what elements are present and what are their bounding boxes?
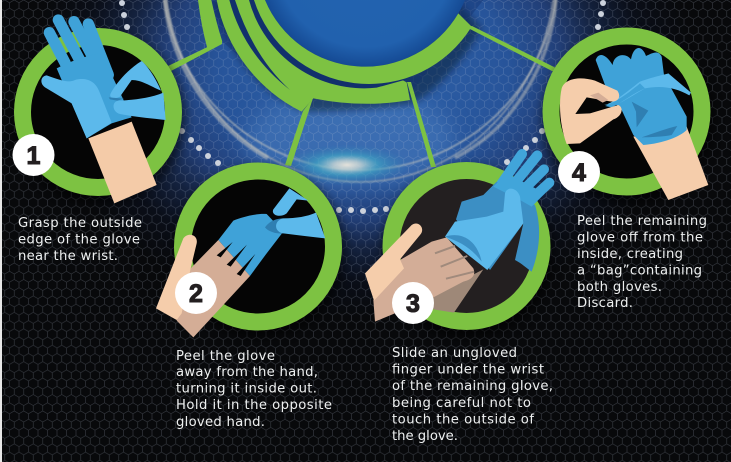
connector step 2 (285, 98, 313, 166)
central hub with green arcs (198, 0, 483, 112)
text: step 3: of the remaining glove, (392, 379, 553, 394)
arc to step 2 (217, 0, 410, 112)
bare hand (560, 78, 622, 144)
light ring with glow (162, 0, 558, 185)
dark crescents between arcs (229, 0, 290, 90)
text: step 2: turning it inside out. (176, 382, 317, 396)
text: step 1: near the wrist. (18, 249, 118, 264)
connectors (168, 26, 556, 167)
badge 2 (175, 272, 217, 314)
connector step 3 (407, 82, 436, 167)
step 1 illustration (12, 20, 186, 204)
text: step 4: Peel the remaining (577, 214, 707, 229)
glove on peeled hand (218, 214, 283, 276)
arm (88, 122, 157, 203)
peeled cuff (604, 73, 691, 105)
text: step 2: away from the hand, (176, 365, 318, 380)
text: step 4: Discard. (577, 296, 633, 311)
text: step 4: glove off from the (577, 230, 703, 246)
badge 1 (12, 134, 54, 176)
text: step 4: inside, creating (577, 247, 683, 262)
text: step 2 (176, 349, 332, 430)
text: step 2: gloved hand. (176, 415, 265, 430)
badge 3: 3 (406, 290, 420, 318)
text: step 1: Grasp the outside (18, 216, 142, 231)
text: step 3: the glove. (392, 429, 458, 444)
text: step 1: edge of the glove (18, 232, 140, 248)
text: step 3: Slide an ungloved (392, 346, 517, 361)
ring 1 (22, 36, 174, 188)
bare hand (373, 237, 474, 322)
glove front (445, 189, 523, 270)
step 4 illustration (542, 32, 714, 204)
gloved fingers base (493, 173, 545, 207)
arc to step 1 (198, 0, 222, 48)
step 2 illustration (156, 166, 346, 338)
disc (257, 0, 473, 67)
badge 4 (558, 151, 600, 193)
text: step 4: a “bag”containing (577, 264, 702, 278)
fingers (49, 20, 108, 75)
text: step 2: Peel the glove (176, 349, 275, 364)
connector step 4 (466, 26, 556, 72)
gloved pinching hand (273, 188, 308, 216)
badge 4: 4 (572, 159, 586, 187)
text: step 4: both gloves. (577, 280, 662, 295)
step 3 illustration (365, 154, 554, 338)
arm (633, 127, 708, 200)
text: step 3: being careful not to (392, 396, 531, 411)
bare hand (177, 240, 250, 337)
badge 1: 1 (27, 142, 41, 170)
glove rear (502, 154, 549, 203)
finger slits (217, 242, 255, 276)
text: step 2: Hold it in the opposite (176, 398, 332, 413)
badge 3 (392, 282, 434, 324)
text: step 3: touch the outside of (392, 412, 534, 428)
text: step 3 (392, 346, 553, 444)
connector step 1 (168, 40, 222, 71)
text: step 4 (577, 214, 707, 311)
dotted ring (119, 0, 606, 214)
glove (596, 48, 687, 145)
ring 4 (551, 36, 702, 187)
hand shadow (430, 269, 483, 313)
ring 3 (391, 170, 542, 322)
text: step 3: finger under the wrist (392, 362, 544, 378)
badge 2: 2 (189, 280, 203, 308)
ring 2 (182, 171, 334, 322)
pinching hand (110, 61, 161, 98)
text: step 1 (18, 216, 142, 264)
glove front (41, 75, 112, 138)
main ring (254, 0, 472, 84)
